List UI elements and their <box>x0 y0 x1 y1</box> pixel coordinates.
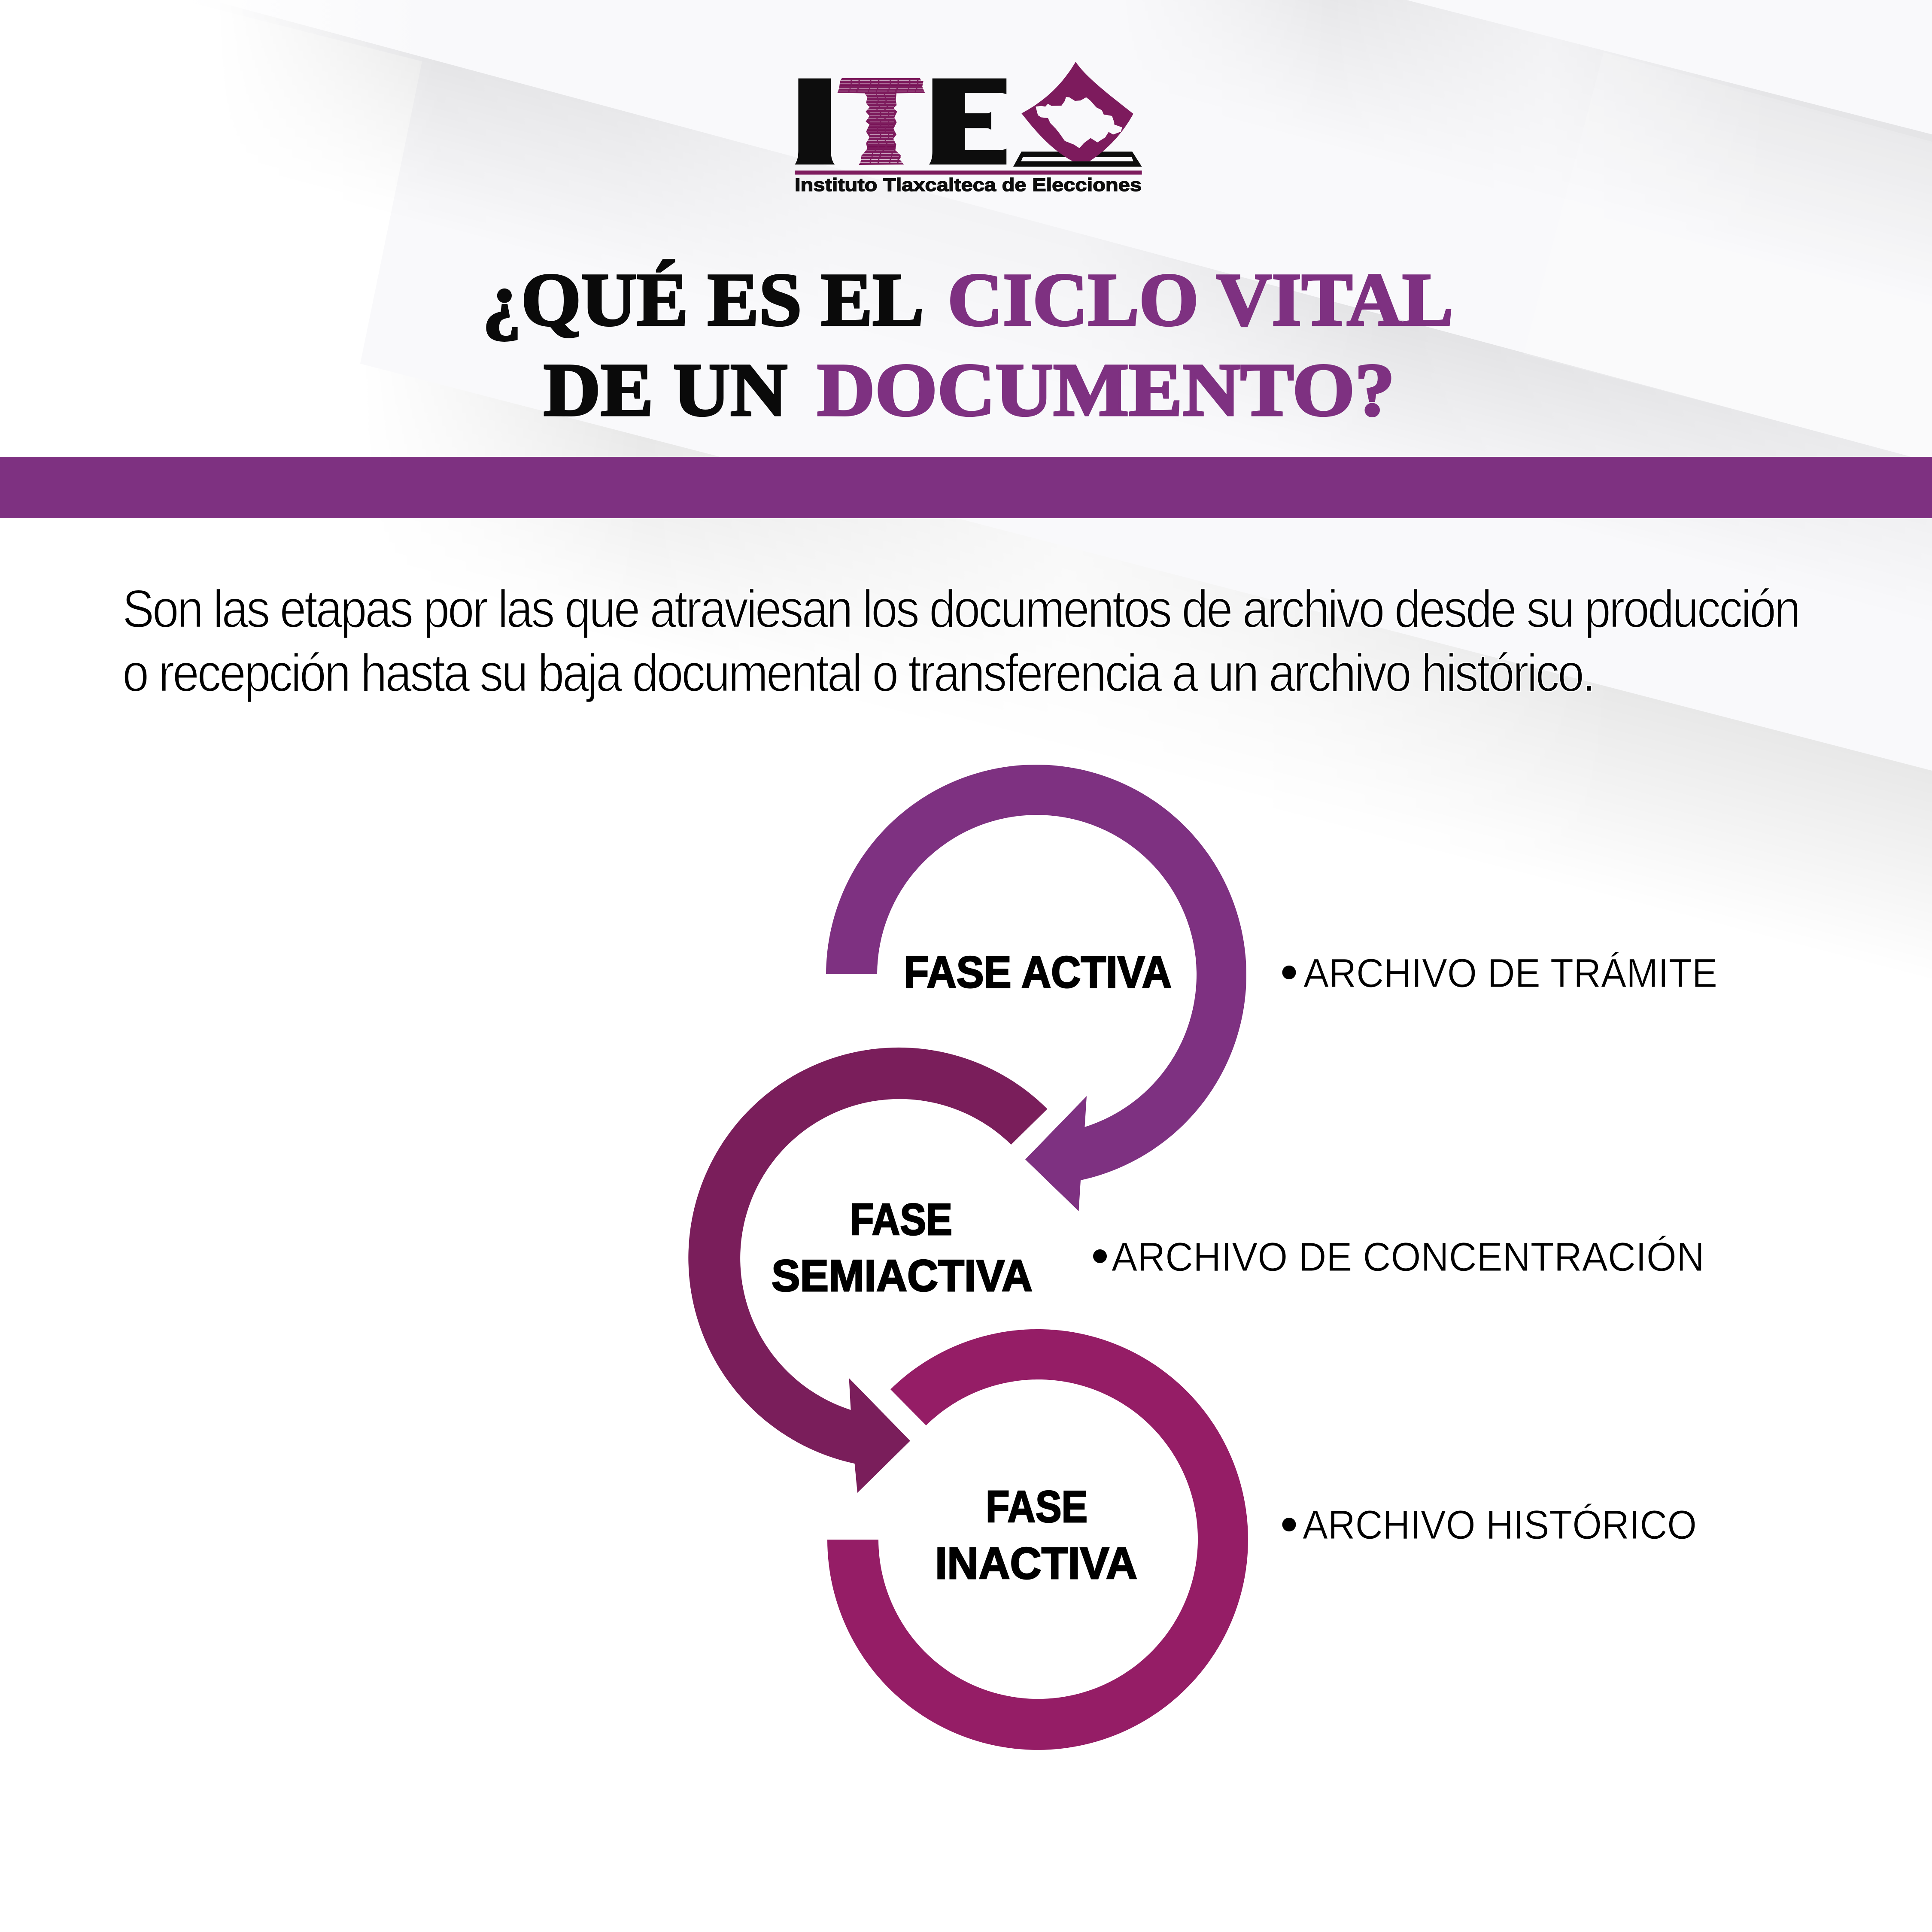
label: fase semiactiva: FASE <box>850 1195 952 1245</box>
intro text: o recepción hasta su baja documental o transferencia a un archivo histórico. <box>122 644 1594 703</box>
arrow ring: fase activa <box>826 765 1246 1211</box>
label: fase inactiva: FASE <box>986 1482 1088 1532</box>
arrow ring: fase inactiva <box>827 1329 1248 1750</box>
background: grey geometric shards <box>276 0 1932 905</box>
purple band <box>0 457 1932 518</box>
title: DE UN <box>544 348 787 432</box>
label: fase semiactiva <box>772 1195 1033 1301</box>
item: archivo de concentración: ARCHIVO DE CONCENTRACIÓN <box>1112 1234 1704 1280</box>
arrow ring: fase semiactiva <box>688 1048 1047 1493</box>
item: archivo de trámite: ARCHIVO DE TRÁMITE <box>1303 951 1717 996</box>
title: DOCUMENTO? <box>817 348 1395 432</box>
intro text <box>122 580 1799 703</box>
title: ¿QUÉ ES EL <box>483 258 924 342</box>
title: CICLO VITAL <box>948 258 1453 342</box>
label: fase inactiva: INACTIVA <box>935 1539 1137 1589</box>
label: fase inactiva <box>935 1482 1137 1589</box>
logo letters and ballot mark <box>795 62 1142 175</box>
logo: ITE <box>795 62 1142 195</box>
label: fase activa: FASE ACTIVA <box>904 948 1172 997</box>
title <box>483 258 1453 432</box>
logo text: Instituto Tlaxcalteca de Elecciones <box>795 175 1142 195</box>
item: archivo histórico: ARCHIVO HISTÓRICO <box>1303 1502 1697 1548</box>
label: fase semiactiva: SEMIACTIVA <box>772 1251 1033 1301</box>
